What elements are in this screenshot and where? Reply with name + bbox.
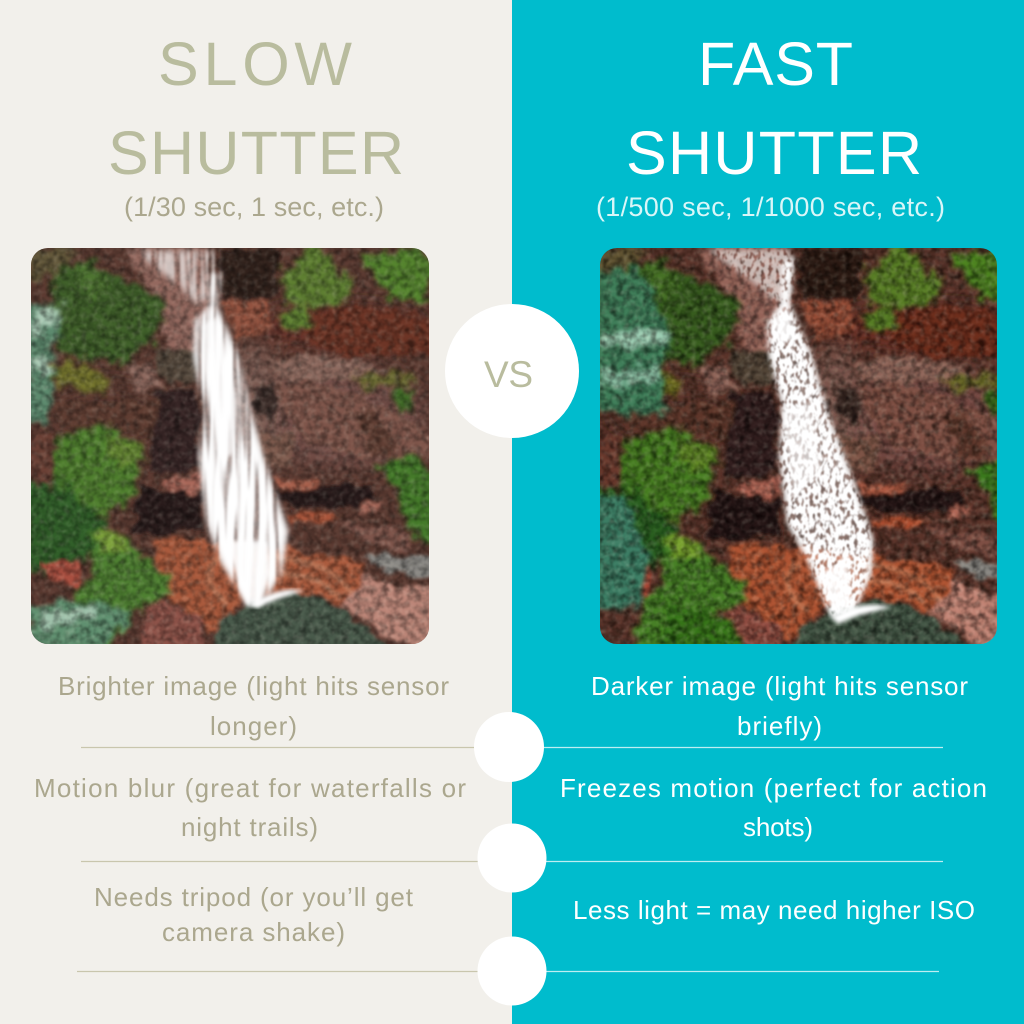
text: fast point 1: Darker image (light hits sensor: [591, 671, 968, 701]
panel: slow shutter background: [0, 0, 512, 1024]
text: slow point 3: camera shake): [162, 917, 345, 947]
text: fast point 2: Freezes motion (perfect for action: [560, 773, 987, 803]
text: slow point 2: Motion blur (great for waterfalls or: [34, 773, 466, 803]
badge: VS circle: VS: [484, 354, 533, 395]
text: slow point 2: [34, 773, 466, 842]
marker: row 1 circle: [474, 712, 544, 782]
divider rules: fast column: [530, 748, 943, 972]
marker: row 2 circle: [478, 824, 546, 892]
upper cascade: [134, 251, 217, 304]
text: slow point 3: Needs tripod (or you’ll get: [94, 882, 414, 912]
heading: fast shutter: SHUTTER: [626, 119, 922, 187]
text: slow point 1: longer): [210, 711, 297, 741]
panel: fast shutter background: [512, 0, 1024, 1024]
text: slow point 2: night trails): [181, 812, 318, 842]
conifer branches: [27, 304, 130, 654]
subheading: fast shutter speeds: (1/500 sec, 1/1000 sec, etc.): [596, 192, 945, 222]
subheading: slow shutter speeds: (1/30 sec, 1 sec, etc.): [124, 192, 384, 222]
waterfall streaks: [194, 272, 288, 606]
upper cascade: [707, 250, 791, 303]
text: slow point 1: [58, 671, 449, 741]
waterfall core: [202, 317, 237, 461]
heading: fast shutter: FAST: [698, 30, 853, 98]
text: slow point 3: [94, 882, 414, 947]
photo: waterfall with slow shutter: [31, 248, 429, 644]
text: fast point 2: [560, 773, 987, 842]
text: fast point 2: shots): [743, 812, 813, 842]
text: slow point 1: Brighter image (light hits sensor: [58, 671, 449, 701]
divider rules: slow column: [77, 748, 490, 972]
heading: fast shutter: [626, 30, 922, 187]
waterfall spray: [768, 256, 873, 617]
badge: VS circle: [445, 304, 579, 438]
heading: slow shutter: SLOW: [158, 30, 352, 98]
photo: waterfall with fast shutter: [600, 248, 997, 644]
heading: slow shutter: [108, 30, 404, 187]
text: fast point 3: Less light = may need higher ISO: [573, 895, 975, 925]
heading: slow shutter: SHUTTER: [108, 119, 404, 187]
waterfall veil: [768, 256, 873, 617]
waterfall veil: [194, 272, 288, 606]
text: fast point 1: briefly): [737, 711, 822, 741]
conifer branches: [593, 266, 744, 654]
marker: row 3 circle: [478, 936, 546, 1006]
text: fast point 1: [591, 671, 968, 741]
